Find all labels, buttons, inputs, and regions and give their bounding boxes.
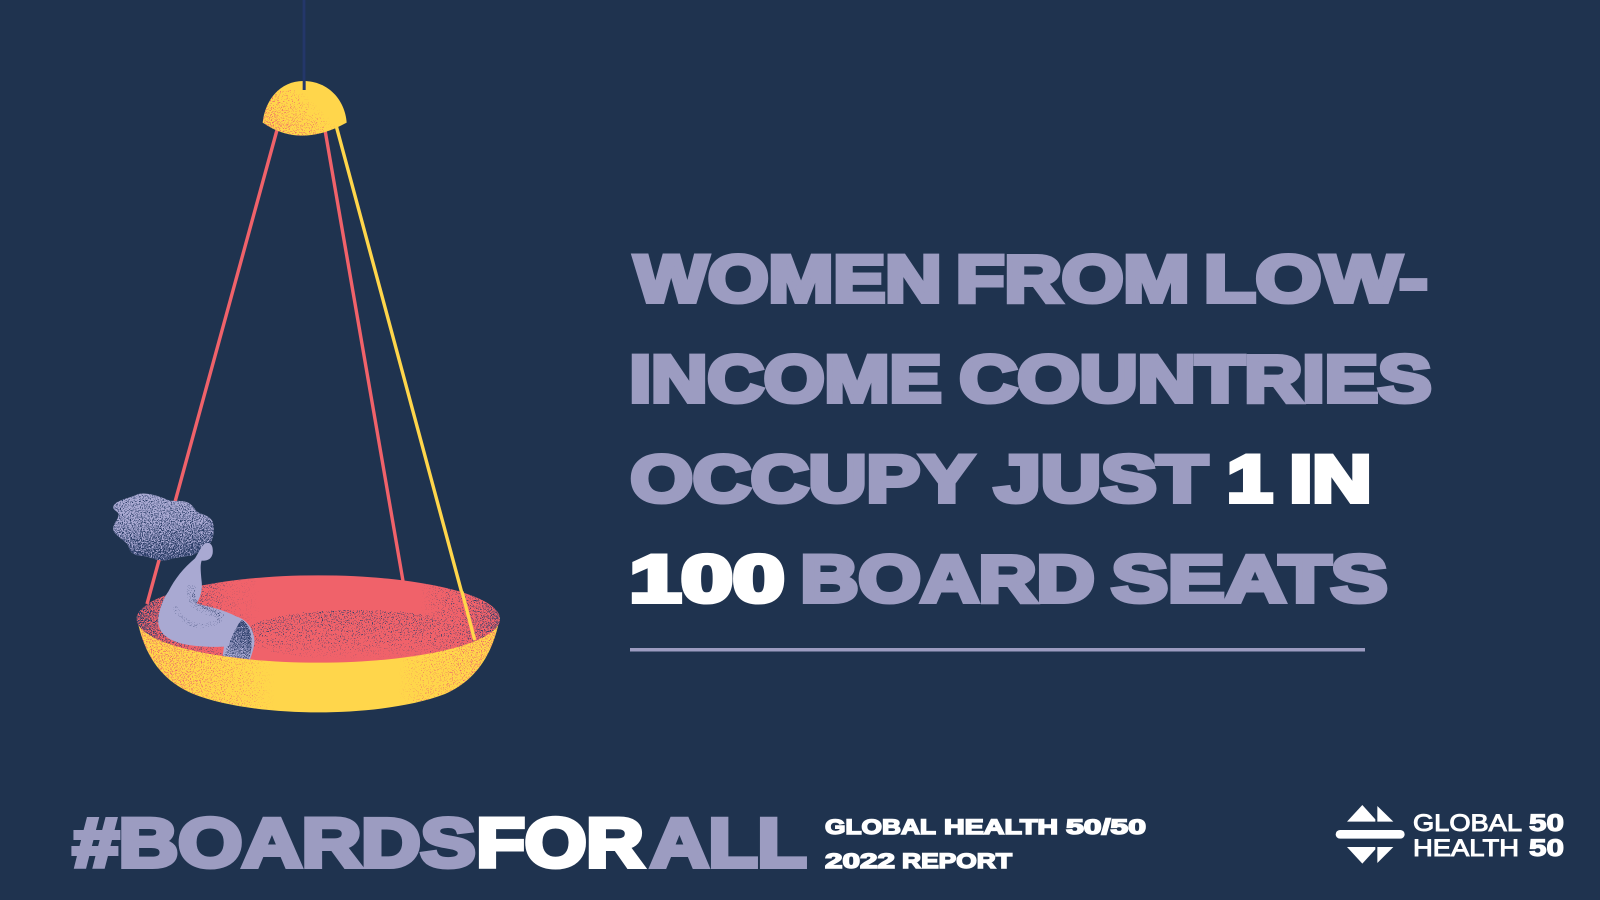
divider rule	[630, 648, 1365, 652]
line 2	[630, 342, 1432, 416]
icon: yellow dome	[260, 80, 350, 137]
yellow suspension line	[336, 127, 474, 640]
line 3: JUST	[994, 442, 1208, 516]
report label: 2022	[825, 849, 895, 873]
hashtag	[73, 804, 806, 882]
scale pan	[137, 575, 500, 713]
line 1: LOW-	[1204, 242, 1428, 316]
logo: Global Health 50/50: 50	[1529, 810, 1564, 837]
report label: GLOBAL	[825, 815, 936, 839]
illustration: woman sitting on a hanging scale pan	[110, 0, 500, 713]
line 3: 1	[1227, 442, 1272, 516]
hashtag: ALL	[650, 804, 806, 882]
left red suspension line	[147, 130, 277, 604]
report label	[825, 815, 1146, 873]
line 1: FROM	[956, 242, 1190, 316]
logo: Global Health 50/50	[1336, 805, 1564, 864]
line 3	[630, 442, 1372, 516]
report label: 50/50	[1066, 815, 1146, 839]
hair	[113, 494, 214, 560]
line 4: BOARD	[800, 542, 1094, 616]
line 1	[634, 242, 1428, 316]
logo: Global Health 50/50: 50	[1529, 835, 1564, 862]
woman figure	[110, 490, 254, 660]
line 4: SEATS	[1112, 542, 1388, 616]
report label: HEALTH	[944, 815, 1058, 839]
hashtag: FOR	[476, 804, 644, 882]
report label: REPORT	[902, 849, 1012, 873]
line 2: INCOME	[630, 342, 942, 416]
line 3: OCCUPY	[630, 442, 974, 516]
headline	[630, 242, 1432, 616]
line 2: COUNTRIES	[960, 342, 1432, 416]
middle red suspension line	[325, 130, 403, 581]
line 4: 100	[630, 542, 784, 616]
logo: Global Health 50/50: HEALTH	[1413, 835, 1519, 862]
logo mark	[1336, 805, 1405, 864]
line 1: WOMEN	[634, 242, 942, 316]
logo wordmark: GLOBAL	[1413, 810, 1522, 837]
line 4	[630, 542, 1388, 616]
hanging thread	[303, 0, 305, 90]
hashtag: #BOARDS	[73, 804, 475, 882]
line 3: IN	[1290, 442, 1372, 516]
body	[158, 543, 254, 660]
